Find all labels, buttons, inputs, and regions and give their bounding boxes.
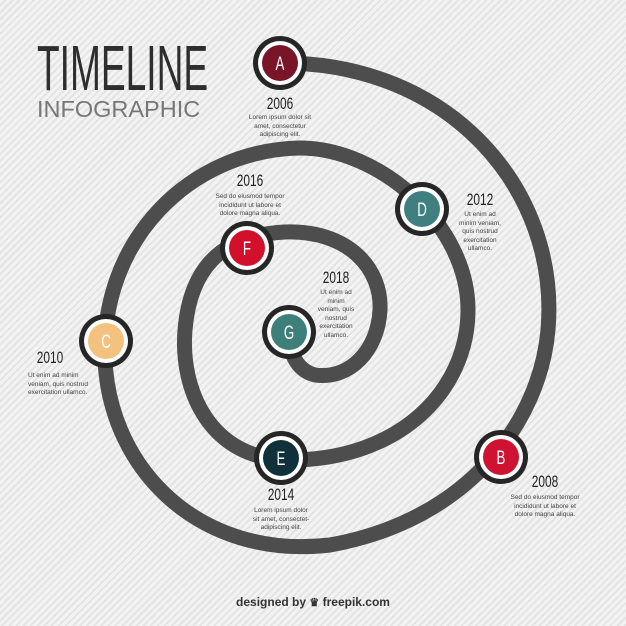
text block 2010: veniam, quis nostrud	[28, 380, 88, 388]
text block 2018: exercitation	[319, 323, 353, 330]
marker F	[220, 221, 274, 275]
marker E	[254, 431, 308, 485]
marker D: D	[417, 200, 427, 221]
text block 2012: 2012	[467, 190, 493, 209]
text block 2018: minim	[327, 298, 345, 304]
text block 2012: exercitation	[463, 236, 497, 244]
text block 2008: incididunt ut labore et	[514, 502, 576, 510]
text block 2006: Lorem ipsum dolor sit	[249, 114, 311, 121]
text block 2014: 2014	[268, 485, 294, 504]
text block 2006	[249, 94, 311, 138]
text block 2018: 2018	[323, 268, 349, 287]
text block 2010: 2010	[37, 348, 63, 367]
marker B	[474, 430, 528, 484]
footer credit: designed by ♛ freepik.com	[236, 595, 390, 609]
text block 2016	[215, 171, 284, 217]
text block 2016: dolore magna aliqua.	[220, 210, 280, 217]
title: INFOGRAPHIC	[37, 96, 200, 122]
marker G: G	[284, 323, 294, 344]
marker A	[253, 36, 307, 90]
marker F: F	[243, 239, 251, 260]
marker B: B	[497, 448, 505, 469]
text block 2014: adipiscing elit.	[261, 524, 301, 531]
text block 2008: Sed do eiusmod tempor	[510, 494, 580, 501]
text block 2016: incididunt ut labore et	[219, 202, 281, 208]
text block 2008: 2008	[532, 472, 558, 491]
title: TIMELINE	[37, 32, 208, 104]
text block 2006: amet, consectetur	[254, 122, 306, 130]
text block 2012: minim veniam,	[459, 220, 501, 226]
text block 2016: Sed do eiusmod tempor	[215, 193, 284, 200]
text block 2018: Ut enim ad	[320, 289, 352, 296]
text block 2018: nostrud	[325, 314, 347, 322]
marker A: A	[276, 54, 284, 75]
text block 2012: Ut enim ad	[464, 211, 496, 218]
marker D	[395, 182, 449, 236]
text block 2018: veniam, quis	[318, 306, 354, 313]
text block 2014	[253, 485, 309, 531]
marker E: E	[277, 449, 285, 470]
text block 2018: ullamco.	[324, 332, 348, 338]
text block 2012: quis nostrud	[462, 228, 498, 235]
text block 2010	[28, 348, 88, 396]
text block 2006: 2006	[267, 94, 293, 113]
marker C: C	[101, 332, 111, 353]
text block 2010: Ut enim ad minim	[28, 372, 79, 379]
text block 2008: dolore magna aliqua.	[515, 511, 575, 518]
marker G	[262, 305, 316, 359]
text block 2014: Lorem ipsum dolor	[254, 507, 308, 514]
text block 2012: ullamco.	[468, 245, 492, 252]
text block 2010: exercitation ullamco.	[28, 389, 87, 396]
marker C	[79, 314, 133, 368]
text block 2006: adipiscing elit.	[260, 131, 300, 138]
text block 2012	[459, 190, 501, 252]
text block 2008	[510, 472, 580, 518]
text block 2016: 2016	[237, 171, 263, 190]
text block 2018	[318, 268, 354, 338]
text block 2014: sit amet, consectet-	[253, 516, 309, 522]
